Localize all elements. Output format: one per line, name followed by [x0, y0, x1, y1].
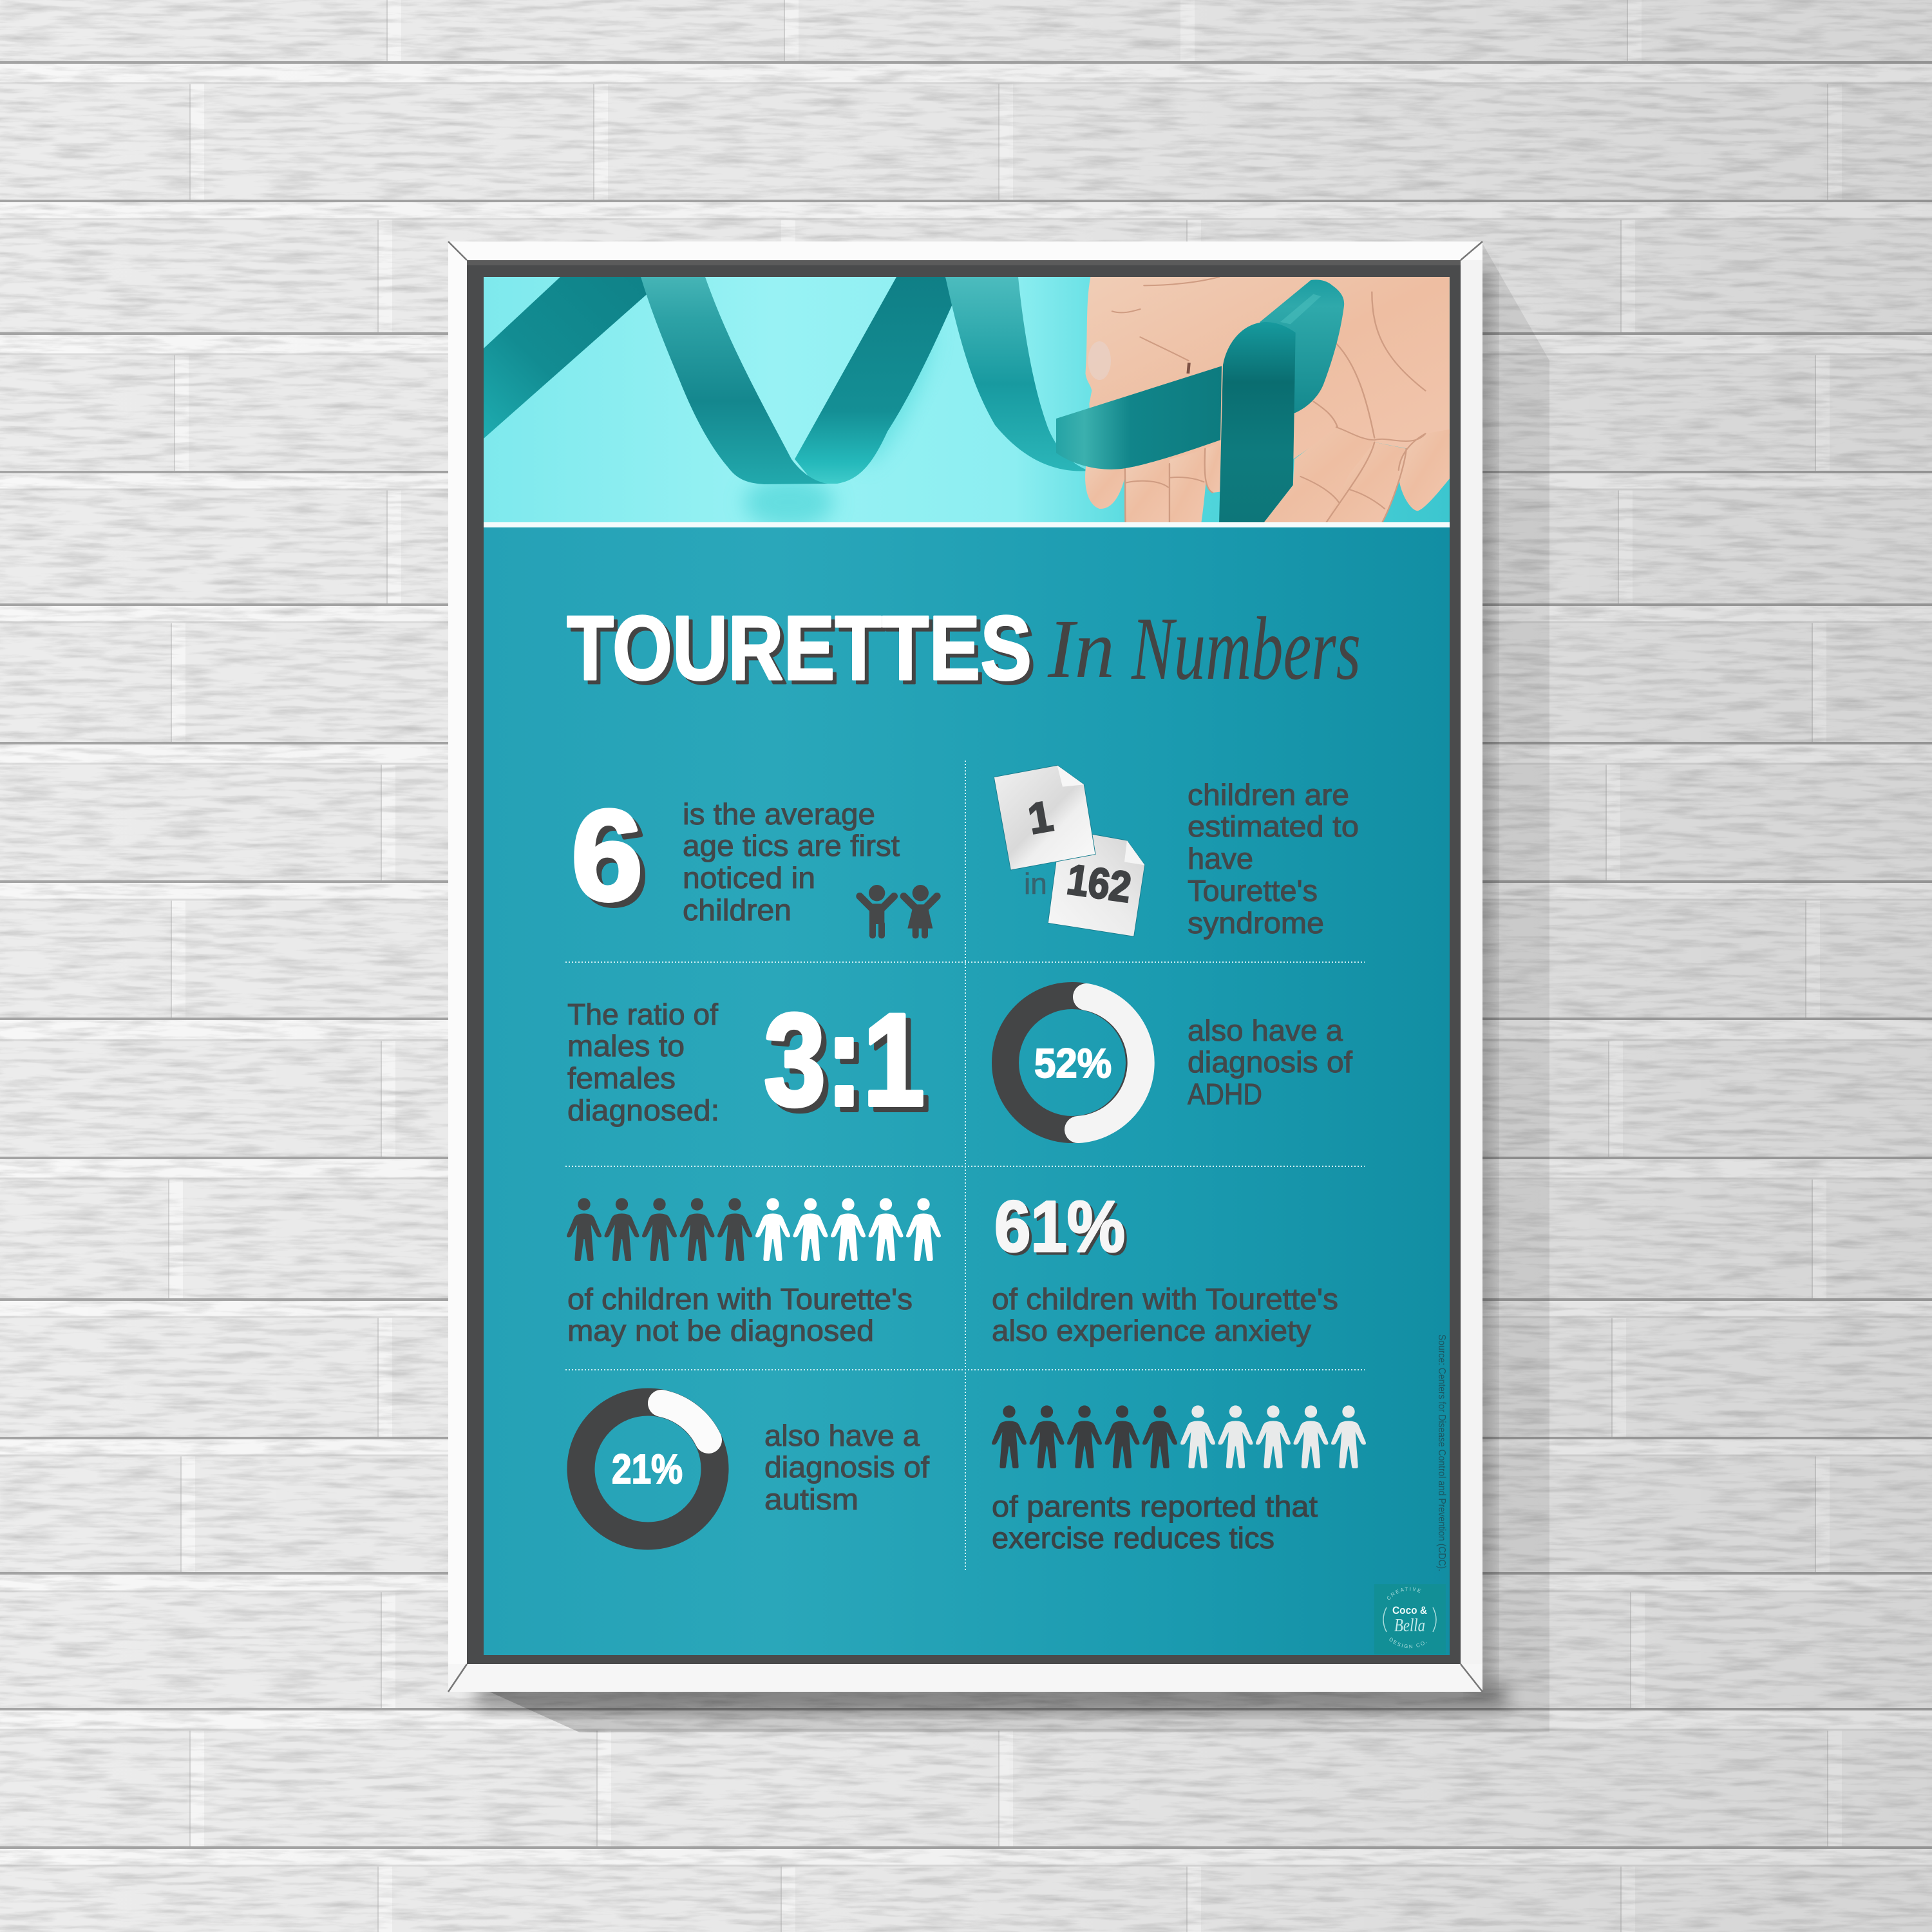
- note: 162: [1048, 829, 1145, 936]
- text: average age: children: [683, 893, 791, 927]
- donut chart 52%: [1005, 996, 1141, 1130]
- icon: two children: [860, 885, 937, 938]
- big number 61%: 61%: [994, 1186, 1125, 1267]
- hand creases: [1112, 277, 1425, 523]
- big number 6: 6: [576, 789, 648, 933]
- donut chart 21%: [581, 1402, 715, 1536]
- text: exercise: exercise reduces tics: [992, 1521, 1274, 1555]
- text: undiagnosed: may not be diagnosed: [567, 1314, 874, 1347]
- text: ADHD: [1188, 1014, 1352, 1111]
- text: estimated children: children are: [1188, 778, 1349, 811]
- text: estimated children: syndrome: [1188, 906, 1324, 940]
- stat: 21% autism: [581, 1402, 929, 1536]
- big number 6: 6: [571, 784, 643, 927]
- text: autism: diagnosis of: [764, 1450, 929, 1484]
- title: TOURETTES: TOURETTES: [567, 597, 1032, 699]
- poster panel: [484, 522, 1450, 1655]
- text: estimated children: estimated to: [1188, 810, 1359, 843]
- ribbon segment: falling towards hands: [945, 277, 1089, 471]
- grid dividers: [565, 761, 1365, 1572]
- ribbon segment: left diagonal: [484, 277, 650, 439]
- logo: Coco and Bella: CREATIVE: [1387, 1587, 1421, 1600]
- logo: Coco and Bella: Coco &: [1392, 1604, 1427, 1616]
- header photo: teal ribbon held in hands: [484, 277, 1450, 528]
- stat: age 6: [571, 784, 937, 938]
- stat: 52% ADHD: [1005, 996, 1352, 1130]
- stat: exercise reduces tics: [992, 1405, 1366, 1555]
- note: 1: [994, 765, 1095, 870]
- label: in: in: [1024, 867, 1047, 900]
- text: average age: is the average: [683, 797, 875, 831]
- note: 162: 162: [1064, 856, 1134, 912]
- ribbon segment: descending: [641, 277, 828, 484]
- title: In Numbers: In: [1047, 603, 1115, 696]
- title: TOURETTES: TOURETTES: [571, 601, 1036, 703]
- big number 3:1: 3:1: [769, 992, 930, 1139]
- stat: ratio 3:1: [567, 987, 930, 1139]
- title: [567, 597, 1361, 703]
- text: ratio: The ratio of: [567, 998, 718, 1031]
- stat: 1 in 162: [994, 765, 1359, 940]
- text: ratio: males to: [567, 1029, 685, 1063]
- ribbon front tail: [1219, 322, 1296, 523]
- text: average age: noticed in: [683, 861, 815, 895]
- logo: Coco and Bella: Bella: [1394, 1615, 1425, 1636]
- logo: Coco and Bella: [1374, 1584, 1446, 1654]
- text: anxiety: of children with Tourette's: [992, 1282, 1338, 1316]
- text: estimated children: have: [1188, 842, 1253, 875]
- text: estimated children: [1188, 778, 1359, 940]
- text: autism: also have a: [764, 1419, 920, 1452]
- text: ratio: females: [567, 1061, 676, 1095]
- white divider under photo: [484, 522, 1450, 527]
- text: undiagnosed: of children with Tourette's: [567, 1282, 913, 1316]
- text: estimated children: Tourette's: [1188, 874, 1318, 907]
- text: anxiety: [992, 1282, 1338, 1347]
- title: In Numbers: [1047, 599, 1361, 699]
- text: autism: autism: [764, 1482, 858, 1516]
- stat: may not be diagnosed: [567, 1198, 941, 1347]
- frame shadow on wall: [477, 243, 1549, 1732]
- big number 61%: 61%: [997, 1189, 1128, 1269]
- text: ADHD: also have a: [1188, 1014, 1343, 1047]
- pictogram: 5 of 10 people: [567, 1198, 941, 1261]
- text: anxiety: also experience anxiety: [992, 1314, 1311, 1347]
- ribbon segment: rising: [795, 277, 953, 484]
- text: exercise: [992, 1490, 1318, 1555]
- ribbon crossing band: [1056, 366, 1222, 469]
- title: In Numbers: Numbers: [1131, 599, 1361, 699]
- text: ratio: [567, 998, 719, 1127]
- text: average age: age tics are first: [683, 829, 900, 862]
- icon: paper notes: [994, 765, 1145, 936]
- text: exercise: of parents reported that: [992, 1490, 1318, 1523]
- white frame: [448, 242, 1482, 1692]
- text: ratio: diagnosed:: [567, 1094, 719, 1127]
- text: average age: [683, 797, 900, 927]
- text: undiagnosed: [567, 1282, 913, 1347]
- big number 3:1: 3:1: [764, 987, 925, 1133]
- donut chart 21%: 21%: [612, 1446, 683, 1492]
- note: 1: 1: [1025, 792, 1056, 844]
- text: ADHD: diagnosis of: [1188, 1045, 1352, 1079]
- ribbon loop back: [1260, 279, 1344, 413]
- donut chart 52%: 52%: [1034, 1040, 1112, 1086]
- logo: Coco and Bella: DESIGN CO.: [1389, 1637, 1427, 1649]
- hands and ribbon loop: [1056, 277, 1450, 523]
- source note: Source: Centers for Disease Control and Prevention (CDC).: [1436, 1334, 1447, 1571]
- text: ADHD: ADHD: [1188, 1077, 1262, 1111]
- hands: [1085, 277, 1450, 523]
- stat: 61% anxiety: [992, 1186, 1338, 1347]
- pictogram: 5 of 10 people: [992, 1405, 1366, 1468]
- text: autism: [764, 1419, 929, 1516]
